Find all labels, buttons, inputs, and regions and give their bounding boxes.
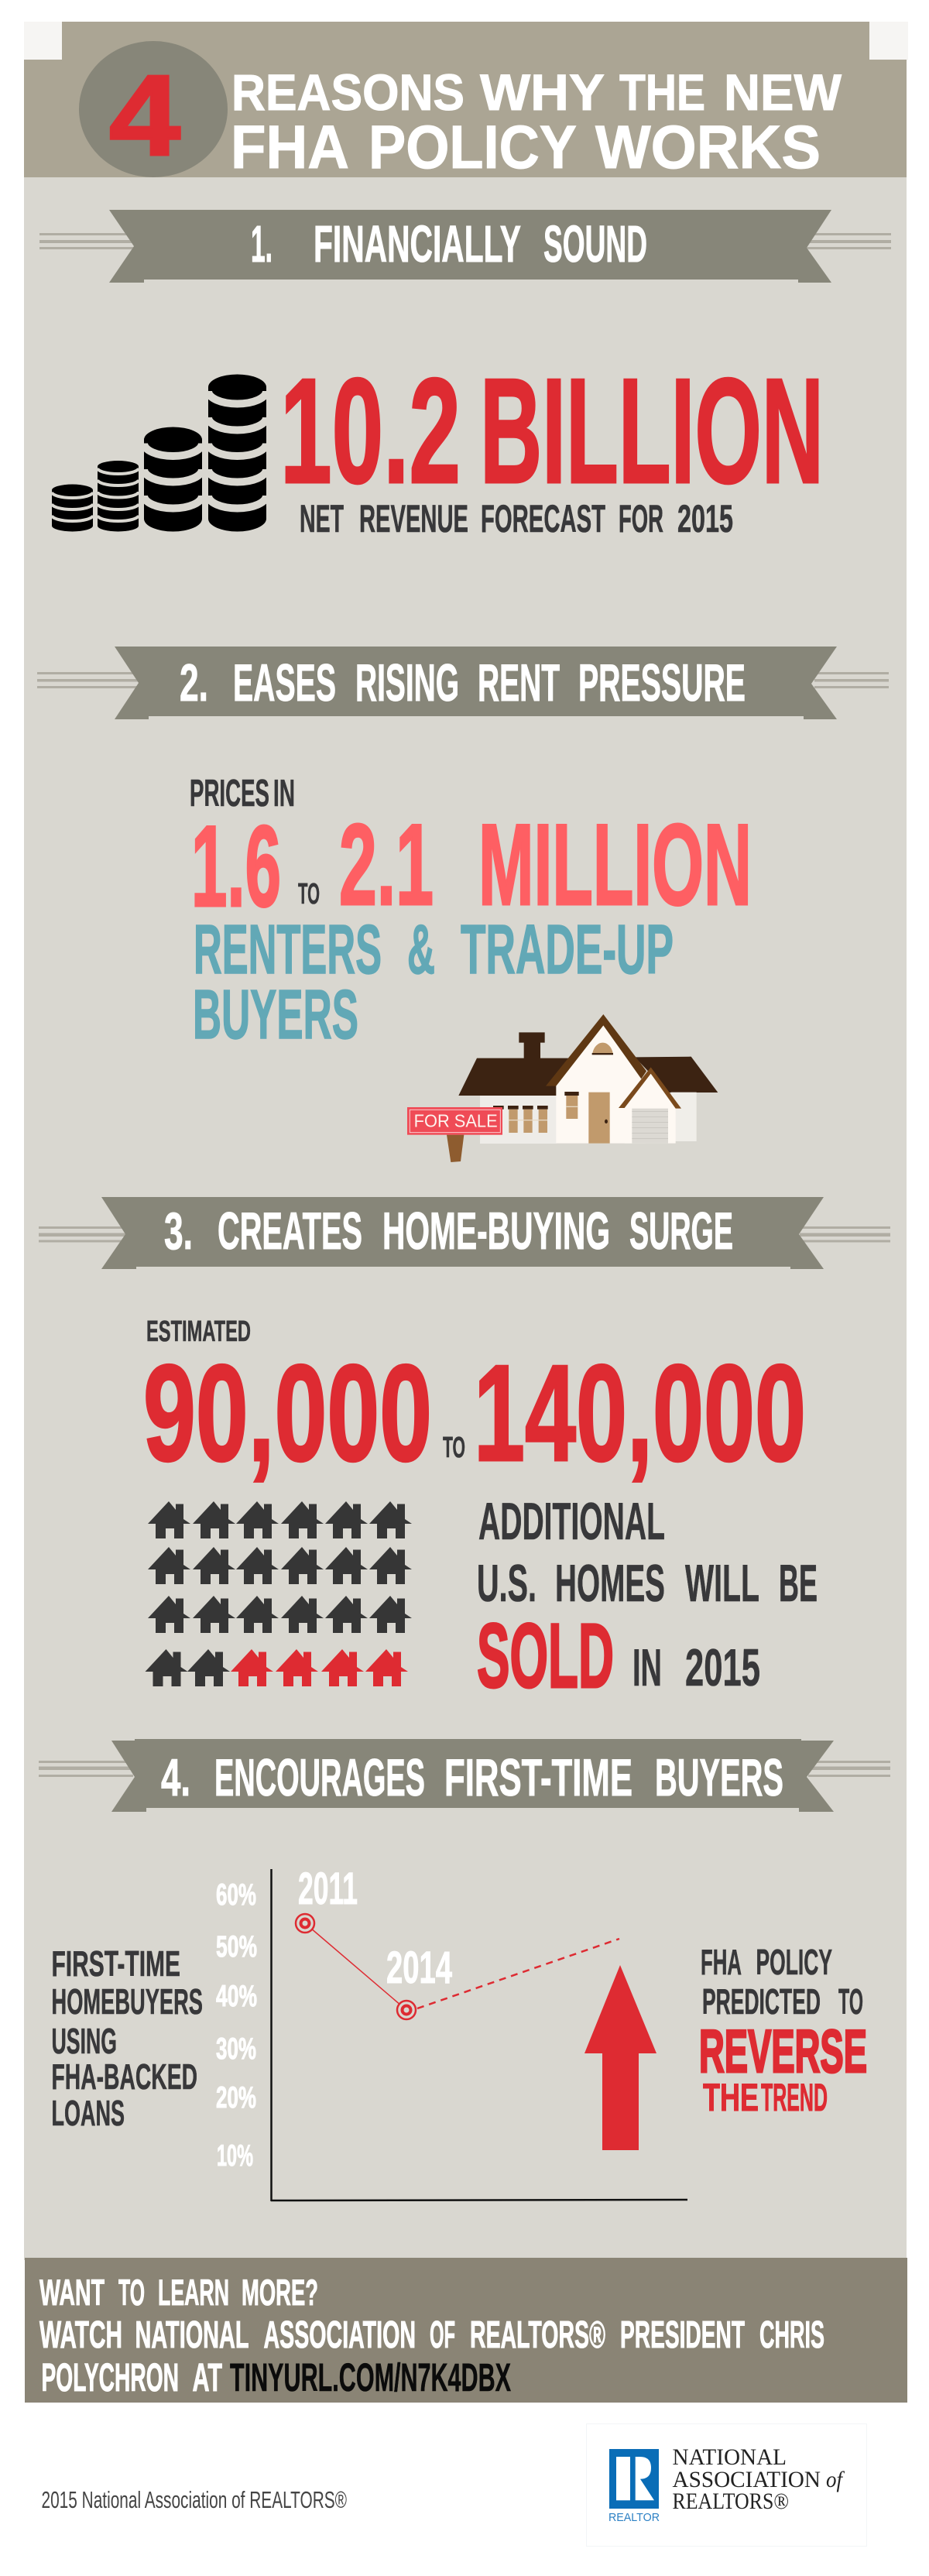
heading ribbon 1: FINANCIALLY — [314, 215, 521, 273]
panel: title banner — [24, 22, 908, 181]
stat: 1.6 to 2.1 million: 1.6 — [191, 801, 281, 931]
icon: house with for sale sign — [407, 1014, 718, 1162]
text: additional u.s. homes will be sold in 2015 — [477, 1492, 818, 1707]
text: prices in: IN — [273, 773, 295, 815]
line: want to learn more — [39, 2272, 318, 2313]
heading ribbon 4: 4. — [161, 1748, 190, 1807]
line: polychron at url — [42, 2355, 511, 2399]
logo: national association of realtors — [587, 2423, 867, 2546]
marker 2014 — [397, 2001, 416, 2019]
text: additional u.s. homes will be sold in 2015: HOMES — [555, 1554, 665, 1613]
text: renters and trade-up buyers — [193, 911, 674, 1054]
line: watch president — [39, 2314, 824, 2356]
line: watch president: ASSOCIATION — [263, 2314, 416, 2356]
text: renters and trade-up buyers: TRADE-UP — [461, 911, 674, 989]
line: want to learn more: MORE? — [242, 2272, 318, 2313]
big number 4: 4 — [109, 52, 180, 180]
heading ribbon 3 — [39, 1197, 890, 1269]
line: polychron at url: AT — [192, 2355, 222, 2399]
icon: realtor R block: REALTOR — [608, 2511, 660, 2524]
line: watch president: NATIONAL — [135, 2314, 249, 2356]
text: estimated: ESTIMATED — [146, 1315, 251, 1348]
heading ribbon 4 — [39, 1739, 890, 1812]
text: fha policy predicted to reverse the trend: TREND — [761, 2076, 828, 2119]
line: watch president: REALTORS® — [470, 2314, 605, 2356]
text: fha policy predicted to reverse the trend — [699, 1942, 867, 2119]
panel: footer call to action — [25, 2258, 907, 2403]
title text: WHY — [480, 63, 605, 121]
text: additional u.s. homes will be sold in 2015: SOLD — [477, 1605, 614, 1707]
y axis labels: 10% — [217, 2139, 253, 2173]
line: watch president: OF — [430, 2314, 455, 2356]
caption: net revenue forecast: REVENUE — [359, 497, 468, 540]
text: first-time homebuyers using fha-backed loans: USING — [51, 2021, 117, 2061]
text: fha policy predicted to reverse the trend: POLICY — [756, 1942, 832, 1982]
heading ribbon 2: RISING — [355, 653, 459, 712]
y axis labels: 40% — [216, 1980, 257, 2013]
heading ribbon 1: SOUND — [543, 215, 647, 273]
logo: national association of realtors: of — [826, 2467, 845, 2492]
title text: THE — [619, 63, 705, 121]
text: first-time homebuyers using fha-backed loans: FIRST-TIME — [51, 1943, 180, 1984]
text: first-time homebuyers using fha-backed loans — [51, 1943, 203, 2133]
year labels: 2011 — [298, 1864, 358, 1914]
text: first-time homebuyers using fha-backed loans: HOMEBUYERS — [51, 1981, 203, 2022]
caption: net revenue forecast: 2015 — [677, 497, 733, 540]
text: renters and trade-up buyers: BUYERS — [193, 976, 358, 1054]
line: want to learn more: LEARN — [158, 2272, 229, 2313]
icon: realtor R block — [608, 2449, 660, 2524]
icon: house with for sale sign: FOR SALE — [414, 1111, 498, 1131]
heading ribbon 3: SURGE — [629, 1202, 733, 1261]
caption: net revenue forecast: NET — [300, 497, 344, 540]
line: polychron at url: POLYCHRON — [42, 2355, 179, 2399]
heading ribbon 1: 1. — [251, 215, 273, 273]
text: additional u.s. homes will be sold in 2015: U.S. — [477, 1554, 536, 1613]
text: additional u.s. homes will be sold in 2015: ADDITIONAL — [478, 1492, 665, 1551]
arrow: up red — [584, 1965, 656, 2150]
text: fha policy predicted to reverse the trend: TO — [838, 1981, 863, 2022]
text: first-time homebuyers using fha-backed loans: LOANS — [51, 2093, 125, 2133]
title text: FHA — [231, 112, 349, 181]
icon: coin stacks — [52, 375, 266, 532]
text: renters and trade-up buyers: & — [407, 911, 435, 989]
text: renters and trade-up buyers: RENTERS — [194, 911, 382, 989]
logo: national association of realtors: ASSOCIATION — [672, 2467, 821, 2492]
stat: 10.2 billion — [280, 347, 824, 514]
text: additional u.s. homes will be sold in 2015: BE — [779, 1554, 818, 1613]
logo: national association of realtors: NATIONAL — [672, 2444, 787, 2470]
marker 2011 — [296, 1914, 314, 1933]
stat: 1.6 to 2.1 million: 2.1 — [339, 800, 434, 929]
line: want to learn more: WANT — [39, 2272, 105, 2313]
text: additional u.s. homes will be sold in 2015: 2015 — [685, 1638, 760, 1697]
line: polychron at url: TINYURL.COM/N7K4DBX — [230, 2355, 511, 2399]
text: fha policy predicted to reverse the trend: THE — [703, 2076, 759, 2119]
title text: NEW — [724, 63, 842, 121]
y axis labels: 30% — [216, 2032, 256, 2066]
text: fha policy predicted to reverse the trend: PREDICTED — [702, 1981, 821, 2022]
caption: net revenue forecast: FORECAST — [481, 497, 605, 540]
heading ribbon 3: HOME-BUYING — [382, 1202, 610, 1261]
title text — [231, 63, 842, 181]
heading ribbon 3: 3. — [164, 1202, 193, 1261]
caption: net revenue forecast: FOR — [619, 497, 663, 540]
line: watch president: CHRIS — [759, 2314, 824, 2356]
y axis labels: 20% — [216, 2081, 256, 2115]
logo: national association of realtors: REALTORS® — [672, 2489, 789, 2514]
stat: 1.6 to 2.1 million — [191, 800, 752, 931]
panel: page body — [24, 177, 907, 2260]
text: additional u.s. homes will be sold in 2015: WILL — [685, 1554, 759, 1613]
heading ribbon 4: ENCOURAGES — [214, 1748, 425, 1807]
line: watch president: WATCH — [39, 2314, 122, 2356]
text: additional u.s. homes will be sold in 2015: IN — [632, 1638, 662, 1697]
icon: house pictogram grid — [146, 1501, 412, 1686]
y axis labels: 60% — [216, 1878, 256, 1912]
heading ribbon 1 — [39, 210, 891, 283]
text: copyright: 2015 National Association of REALTORS® — [42, 2486, 347, 2513]
stat: 90,000 to 140,000: 90,000 — [143, 1336, 432, 1490]
stat: 90,000 to 140,000 — [143, 1336, 806, 1490]
y axis labels — [216, 1878, 257, 2173]
y axis labels: 50% — [216, 1930, 257, 1964]
icon: number circle — [79, 41, 228, 177]
heading ribbon 3: CREATES — [218, 1202, 362, 1261]
title text: WORKS — [595, 112, 821, 181]
title text: POLICY — [369, 112, 577, 181]
heading ribbon 2 — [37, 647, 889, 719]
heading ribbon 2: PRESSURE — [578, 653, 746, 712]
heading ribbon 4: BUYERS — [655, 1748, 783, 1807]
title text: REASONS — [231, 63, 464, 121]
text: fha policy predicted to reverse the trend: FHA — [701, 1942, 742, 1982]
stat: 1.6 to 2.1 million: TO — [298, 878, 320, 911]
year labels: 2014 — [386, 1943, 452, 1993]
line: watch president: PRESIDENT — [620, 2314, 745, 2356]
heading ribbon 4: FIRST-TIME — [444, 1748, 632, 1807]
heading ribbon 2: 2. — [180, 653, 208, 712]
text: first-time homebuyers using fha-backed loans: FHA-BACKED — [51, 2056, 197, 2097]
heading ribbon 2: RENT — [478, 653, 560, 712]
text: prices in: PRICES — [190, 773, 269, 815]
stat: 90,000 to 140,000: TO — [443, 1432, 465, 1464]
heading ribbon 2: EASES — [233, 653, 336, 712]
year labels — [298, 1864, 452, 1993]
line chart — [216, 1864, 687, 2201]
line: want to learn more: TO — [118, 2272, 145, 2313]
stat: 10.2 billion: 10.2 — [280, 347, 461, 514]
caption: net revenue forecast — [300, 497, 733, 540]
